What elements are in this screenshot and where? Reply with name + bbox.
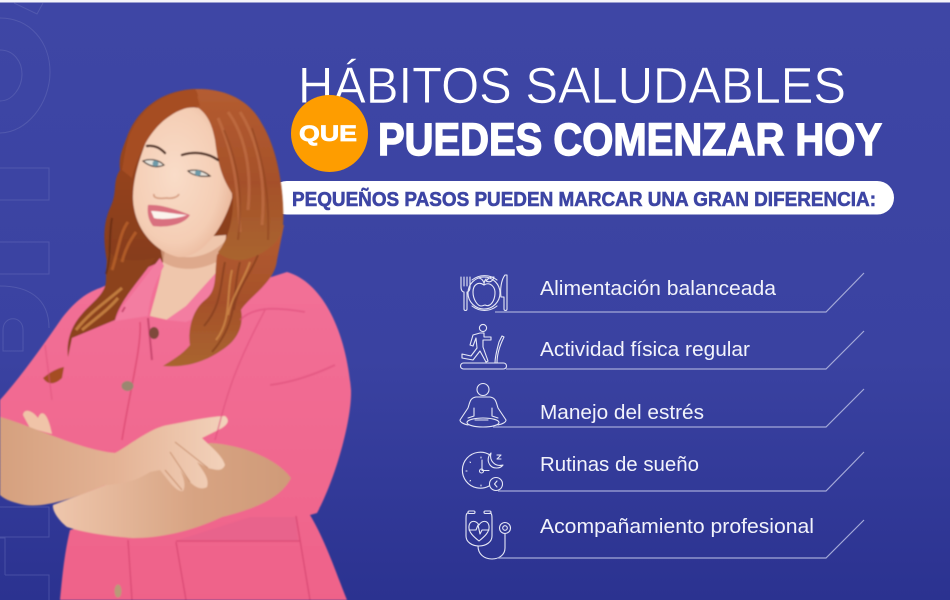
hair front fall, viewer right bbox=[163, 225, 284, 366]
hair over left temple bbox=[122, 89, 200, 178]
dress bbox=[0, 262, 351, 600]
underline bbox=[498, 452, 864, 491]
label: Actividad física regular bbox=[540, 339, 750, 361]
title line 1: HÁBITOS SALUDABLES bbox=[298, 57, 846, 114]
fingers behind arm bbox=[23, 411, 52, 434]
list item: Manejo del estrés bbox=[460, 384, 864, 427]
label: Acompañamiento profesional bbox=[540, 516, 814, 538]
person: smiling woman in pink dress bbox=[0, 89, 351, 600]
subtitle pill: PEQUEÑOS PASOS PUEDEN MARCAR UNA GRAN DIFERENCIA: bbox=[292, 188, 876, 211]
hair back bbox=[104, 89, 283, 320]
icon: stethoscope with heart bbox=[466, 511, 510, 559]
collar bbox=[115, 258, 164, 321]
decorative outlined letters bbox=[0, 3, 50, 600]
mouth bbox=[148, 205, 190, 227]
list item: Acompañamiento profesional bbox=[466, 511, 864, 559]
icon: meditating person bbox=[460, 384, 506, 427]
subtitle pill bbox=[270, 181, 894, 214]
orange badge: QUE: QUE bbox=[299, 121, 357, 146]
title line 2: PUEDES COMENZAR HOY bbox=[378, 114, 882, 165]
belt bbox=[178, 517, 298, 541]
list item: Rutinas de sueño bbox=[462, 452, 864, 491]
label: Alimentación balanceada bbox=[540, 278, 777, 300]
orange badge: QUE bbox=[291, 95, 368, 172]
lower forearm bbox=[53, 443, 291, 538]
eyes bbox=[143, 160, 164, 167]
face bbox=[133, 107, 232, 257]
underline bbox=[497, 520, 864, 558]
underline bbox=[506, 331, 864, 369]
upper forearm and hand bbox=[0, 416, 228, 506]
hair front fall, viewer left bbox=[68, 250, 155, 357]
underline bbox=[493, 389, 864, 427]
list item: Alimentación balanceada bbox=[461, 273, 864, 312]
hair strand behind left bbox=[43, 367, 64, 383]
underline bbox=[495, 273, 864, 312]
label: Manejo del estrés bbox=[540, 402, 704, 424]
hair over right of face bbox=[192, 89, 283, 260]
nose bbox=[154, 194, 179, 198]
neck and chest bbox=[150, 235, 226, 320]
icon: plate with apple and cutlery bbox=[461, 275, 507, 310]
list item: Actividad física regular bbox=[460, 324, 864, 369]
icon: clock with moon bbox=[462, 452, 503, 490]
eyebrows bbox=[147, 146, 165, 153]
top white edge bbox=[0, 0, 950, 2]
buttons bbox=[149, 327, 159, 339]
label: Rutinas de sueño bbox=[540, 454, 699, 476]
icon: runner on treadmill bbox=[460, 324, 506, 369]
